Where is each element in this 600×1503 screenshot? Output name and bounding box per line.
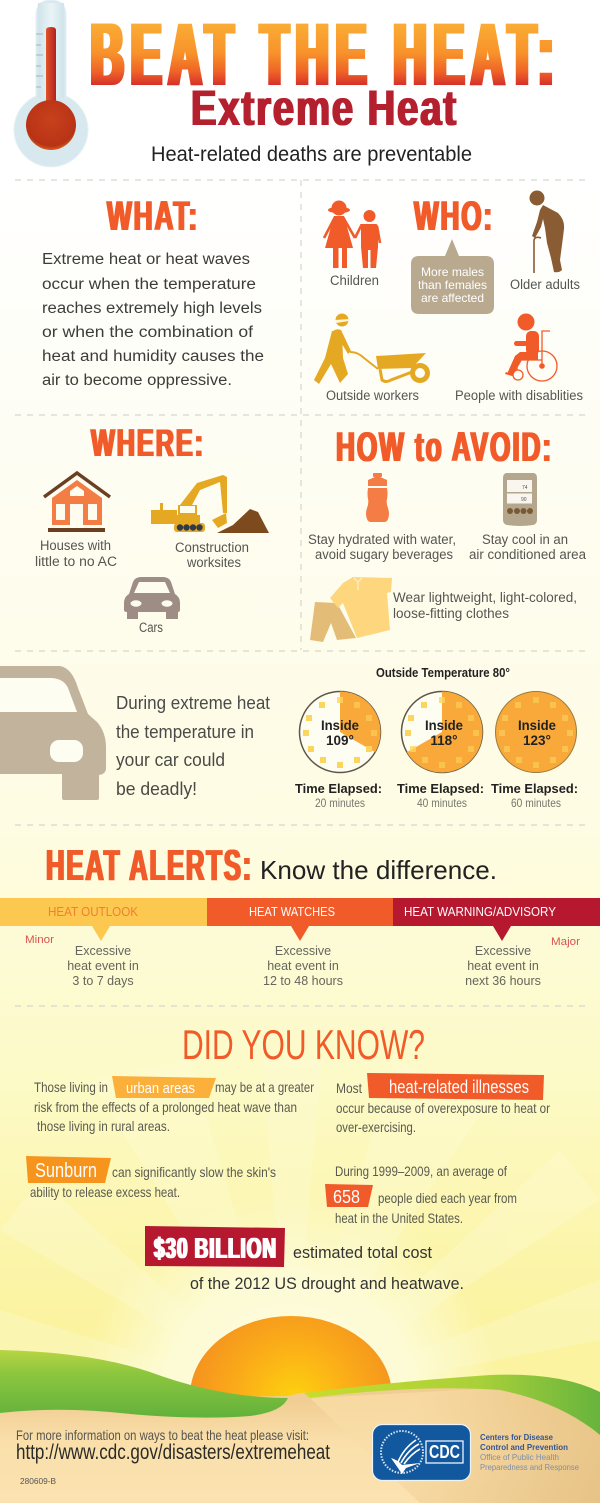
callout: males: than females <box>418 278 487 292</box>
car warning text: be deadly! <box>116 779 197 799</box>
watches text: 12 to 48 hours <box>263 974 343 988</box>
icon: thermostat: 90 <box>521 497 527 503</box>
fact: urban areas: those living in rural areas. <box>37 1118 170 1134</box>
warning text <box>465 944 541 988</box>
cdc name: Preparedness and Response <box>480 1462 579 1472</box>
fact: 30 billion: $30 BILLION <box>154 1233 277 1265</box>
car warning text: the temperature in <box>116 722 254 742</box>
minutes labels <box>315 796 561 810</box>
icon: thermostat: 74 <box>522 485 528 491</box>
label: major: Major <box>551 936 580 948</box>
what description: Extreme heat or heat waves <box>42 251 250 268</box>
watches text: heat event in <box>267 959 339 973</box>
car warning text <box>116 693 270 799</box>
fact: 658 deaths: heat in the United States. <box>335 1210 463 1226</box>
label: construction: Construction <box>175 540 249 555</box>
clock: 40 minutes: 118° <box>430 733 458 748</box>
outlook text: 3 to 7 days <box>72 974 134 988</box>
panel: who <box>314 190 583 403</box>
icon: excavator <box>151 475 269 533</box>
time elapsed labels: Time Elapsed: <box>295 782 382 796</box>
label: stay cool: air conditioned area <box>469 547 586 562</box>
right hill <box>304 1375 600 1435</box>
sand <box>0 1388 600 1503</box>
callout: males: are affected <box>421 291 484 305</box>
heading: heat alerts: HEAT ALERTS: <box>46 841 253 890</box>
panel: heat alerts <box>0 841 600 988</box>
car warning text: During extreme heat <box>116 693 270 713</box>
cdc name: Control and Prevention <box>480 1442 568 1452</box>
subheading: Know the difference. <box>260 855 497 885</box>
alert bar: watches: HEAT WATCHES <box>249 904 335 919</box>
label: clothes <box>393 590 577 621</box>
clock: 20 minutes: 109° <box>326 733 354 748</box>
label: cars: Cars <box>139 620 163 635</box>
fact: urban areas <box>34 1076 314 1134</box>
icon: older adult <box>530 190 564 273</box>
footer: more information: For more information on ways to beat the heat please visit: <box>16 1427 309 1443</box>
what description: reaches extremely high levels <box>42 300 262 317</box>
fact: urban areas: risk from the effects of a prolonged heat wave than <box>34 1099 297 1115</box>
panel: where <box>35 422 269 635</box>
fact: heat-related illnesses <box>336 1073 550 1135</box>
sun rays <box>0 1060 600 1400</box>
what description <box>42 251 264 389</box>
what description: heat and humidity causes the <box>42 348 264 365</box>
minutes labels: 40 minutes <box>417 796 467 810</box>
warning text: heat event in <box>467 959 539 973</box>
label: stay cool <box>469 532 586 562</box>
car warning text: your car could <box>116 750 225 770</box>
alert bar: watches <box>207 898 393 941</box>
minutes labels: 20 minutes <box>315 796 365 810</box>
label: stay hydrated: avoid sugary beverages <box>315 547 453 562</box>
fact: 658 deaths <box>325 1163 517 1226</box>
icon: car <box>124 577 180 619</box>
fact: sunburn: can significantly slow the skin's <box>112 1164 276 1180</box>
outside temperature label: Outside Temperature 80° <box>376 666 510 680</box>
what description: air to become oppressive. <box>42 372 232 389</box>
callout: males <box>411 239 494 314</box>
fact: urban areas: may be at a greater <box>215 1079 314 1095</box>
fact: 658 deaths: people died each year from <box>378 1190 517 1206</box>
icon: person in wheelchair <box>505 314 557 381</box>
sand shading <box>310 1388 600 1503</box>
icon: thermostat <box>503 473 537 526</box>
cdc logo: CDC <box>429 1442 460 1462</box>
label: little AC: little to no AC <box>35 554 117 569</box>
fact: 658 deaths: 658 <box>333 1187 360 1207</box>
icon: outside worker <box>314 314 428 384</box>
tagline: Heat-related deaths are preventable <box>151 143 472 166</box>
clock: 60 minutes: 123° <box>523 733 551 748</box>
warning text: Excessive <box>475 944 531 958</box>
fact: urban areas: Those living in <box>34 1079 108 1095</box>
label: stay hydrated: Stay hydrated with water, <box>308 532 456 547</box>
icon: large car <box>0 666 106 800</box>
fact: heat-related illnesses: occur because of overexposure to heat or <box>336 1100 550 1116</box>
label: stay hydrated <box>308 532 456 562</box>
clock: 20 minutes <box>300 692 381 772</box>
icon: clothes <box>310 577 392 642</box>
cdc logo <box>372 1424 470 1480</box>
label: clothes: Wear lightweight, light-colored, <box>393 590 577 605</box>
subtitle: Extreme Heat <box>191 80 458 136</box>
fact: 658 deaths: During 1999–2009, an average of <box>335 1163 507 1179</box>
fact: 30 billion <box>145 1226 464 1293</box>
sun glow <box>80 1190 500 1503</box>
label: people with disabilities: People with disablities <box>455 388 583 403</box>
cdc name <box>480 1432 579 1472</box>
heading: who: WHO: <box>414 192 494 239</box>
clock: 20 minutes: Inside <box>321 718 359 733</box>
label: worksites: worksites <box>186 555 241 570</box>
footer: more information <box>16 1427 330 1486</box>
watches text <box>263 944 343 988</box>
time elapsed labels: Time Elapsed: <box>491 782 578 796</box>
heading: did you know: DID YOU KNOW? <box>182 1021 425 1068</box>
fact: sunburn <box>26 1156 276 1200</box>
label: children: Children <box>330 273 379 288</box>
fact: sunburn: ability to release excess heat. <box>30 1184 180 1200</box>
panel: how to avoid <box>308 423 586 642</box>
label: older adults: Older adults <box>510 277 580 292</box>
fact: urban areas: urban areas <box>126 1080 195 1097</box>
footer: more information: http://www.cdc.gov/disasters/extremeheat <box>16 1441 330 1464</box>
panel: car temperature <box>0 666 578 810</box>
icon: house <box>44 473 110 532</box>
watches text: Excessive <box>275 944 331 958</box>
fact: 30 billion: of the 2012 US drought and heatwave. <box>190 1274 464 1293</box>
alert bar: outlook: HEAT OUTLOOK <box>48 904 138 919</box>
outlook text <box>67 944 139 988</box>
fact: sunburn: Sunburn <box>35 1160 97 1182</box>
heading: what: WHAT: <box>107 192 199 239</box>
thermometer icon <box>14 0 88 167</box>
time elapsed labels: Time Elapsed: <box>397 782 484 796</box>
panel: what <box>42 192 264 389</box>
label: houses: Houses with <box>40 538 111 553</box>
panel: did you know <box>26 1021 550 1293</box>
cdc name: Office of Public Health <box>480 1452 559 1462</box>
icon: children <box>324 200 380 268</box>
clock: 40 minutes: Inside <box>425 718 463 733</box>
minutes labels: 60 minutes <box>511 796 561 810</box>
alert bar: warning: HEAT WARNING/ADVISORY <box>404 904 556 919</box>
outlook text: Excessive <box>75 944 131 958</box>
label: outside workers: Outside workers <box>326 388 419 403</box>
clock: 40 minutes <box>402 692 482 773</box>
clock: 60 minutes: Inside <box>518 718 556 733</box>
time elapsed labels <box>295 782 578 796</box>
fact: heat-related illnesses: Most <box>336 1080 362 1096</box>
label: clothes: loose-fitting clothes <box>393 606 509 621</box>
fact: heat-related illnesses: over-exercising. <box>336 1119 416 1135</box>
icon: water bottle <box>366 473 389 522</box>
what description: or when the combination of <box>42 324 254 341</box>
fact: heat-related illnesses: heat-related illnesses <box>389 1077 529 1097</box>
footer: more information: 280609-B <box>20 1476 56 1486</box>
clock: 60 minutes <box>496 692 576 772</box>
alert bar: warning <box>393 898 600 941</box>
label: minor: Minor <box>25 934 54 946</box>
what description: occur when the temperature <box>42 276 256 293</box>
sun <box>190 1316 392 1476</box>
alert bar: outlook <box>0 898 207 941</box>
heading: where: WHERE: <box>91 422 205 465</box>
fact: 30 billion: estimated total cost <box>293 1243 432 1262</box>
warning text: next 36 hours <box>465 974 541 988</box>
outlook text: heat event in <box>67 959 139 973</box>
landscape: sun and hills <box>0 1316 600 1503</box>
label: stay cool: Stay cool in an <box>482 532 568 547</box>
cdc name: Centers for Disease <box>480 1432 553 1442</box>
callout: males: More males <box>421 265 484 279</box>
left hill <box>0 1350 288 1418</box>
